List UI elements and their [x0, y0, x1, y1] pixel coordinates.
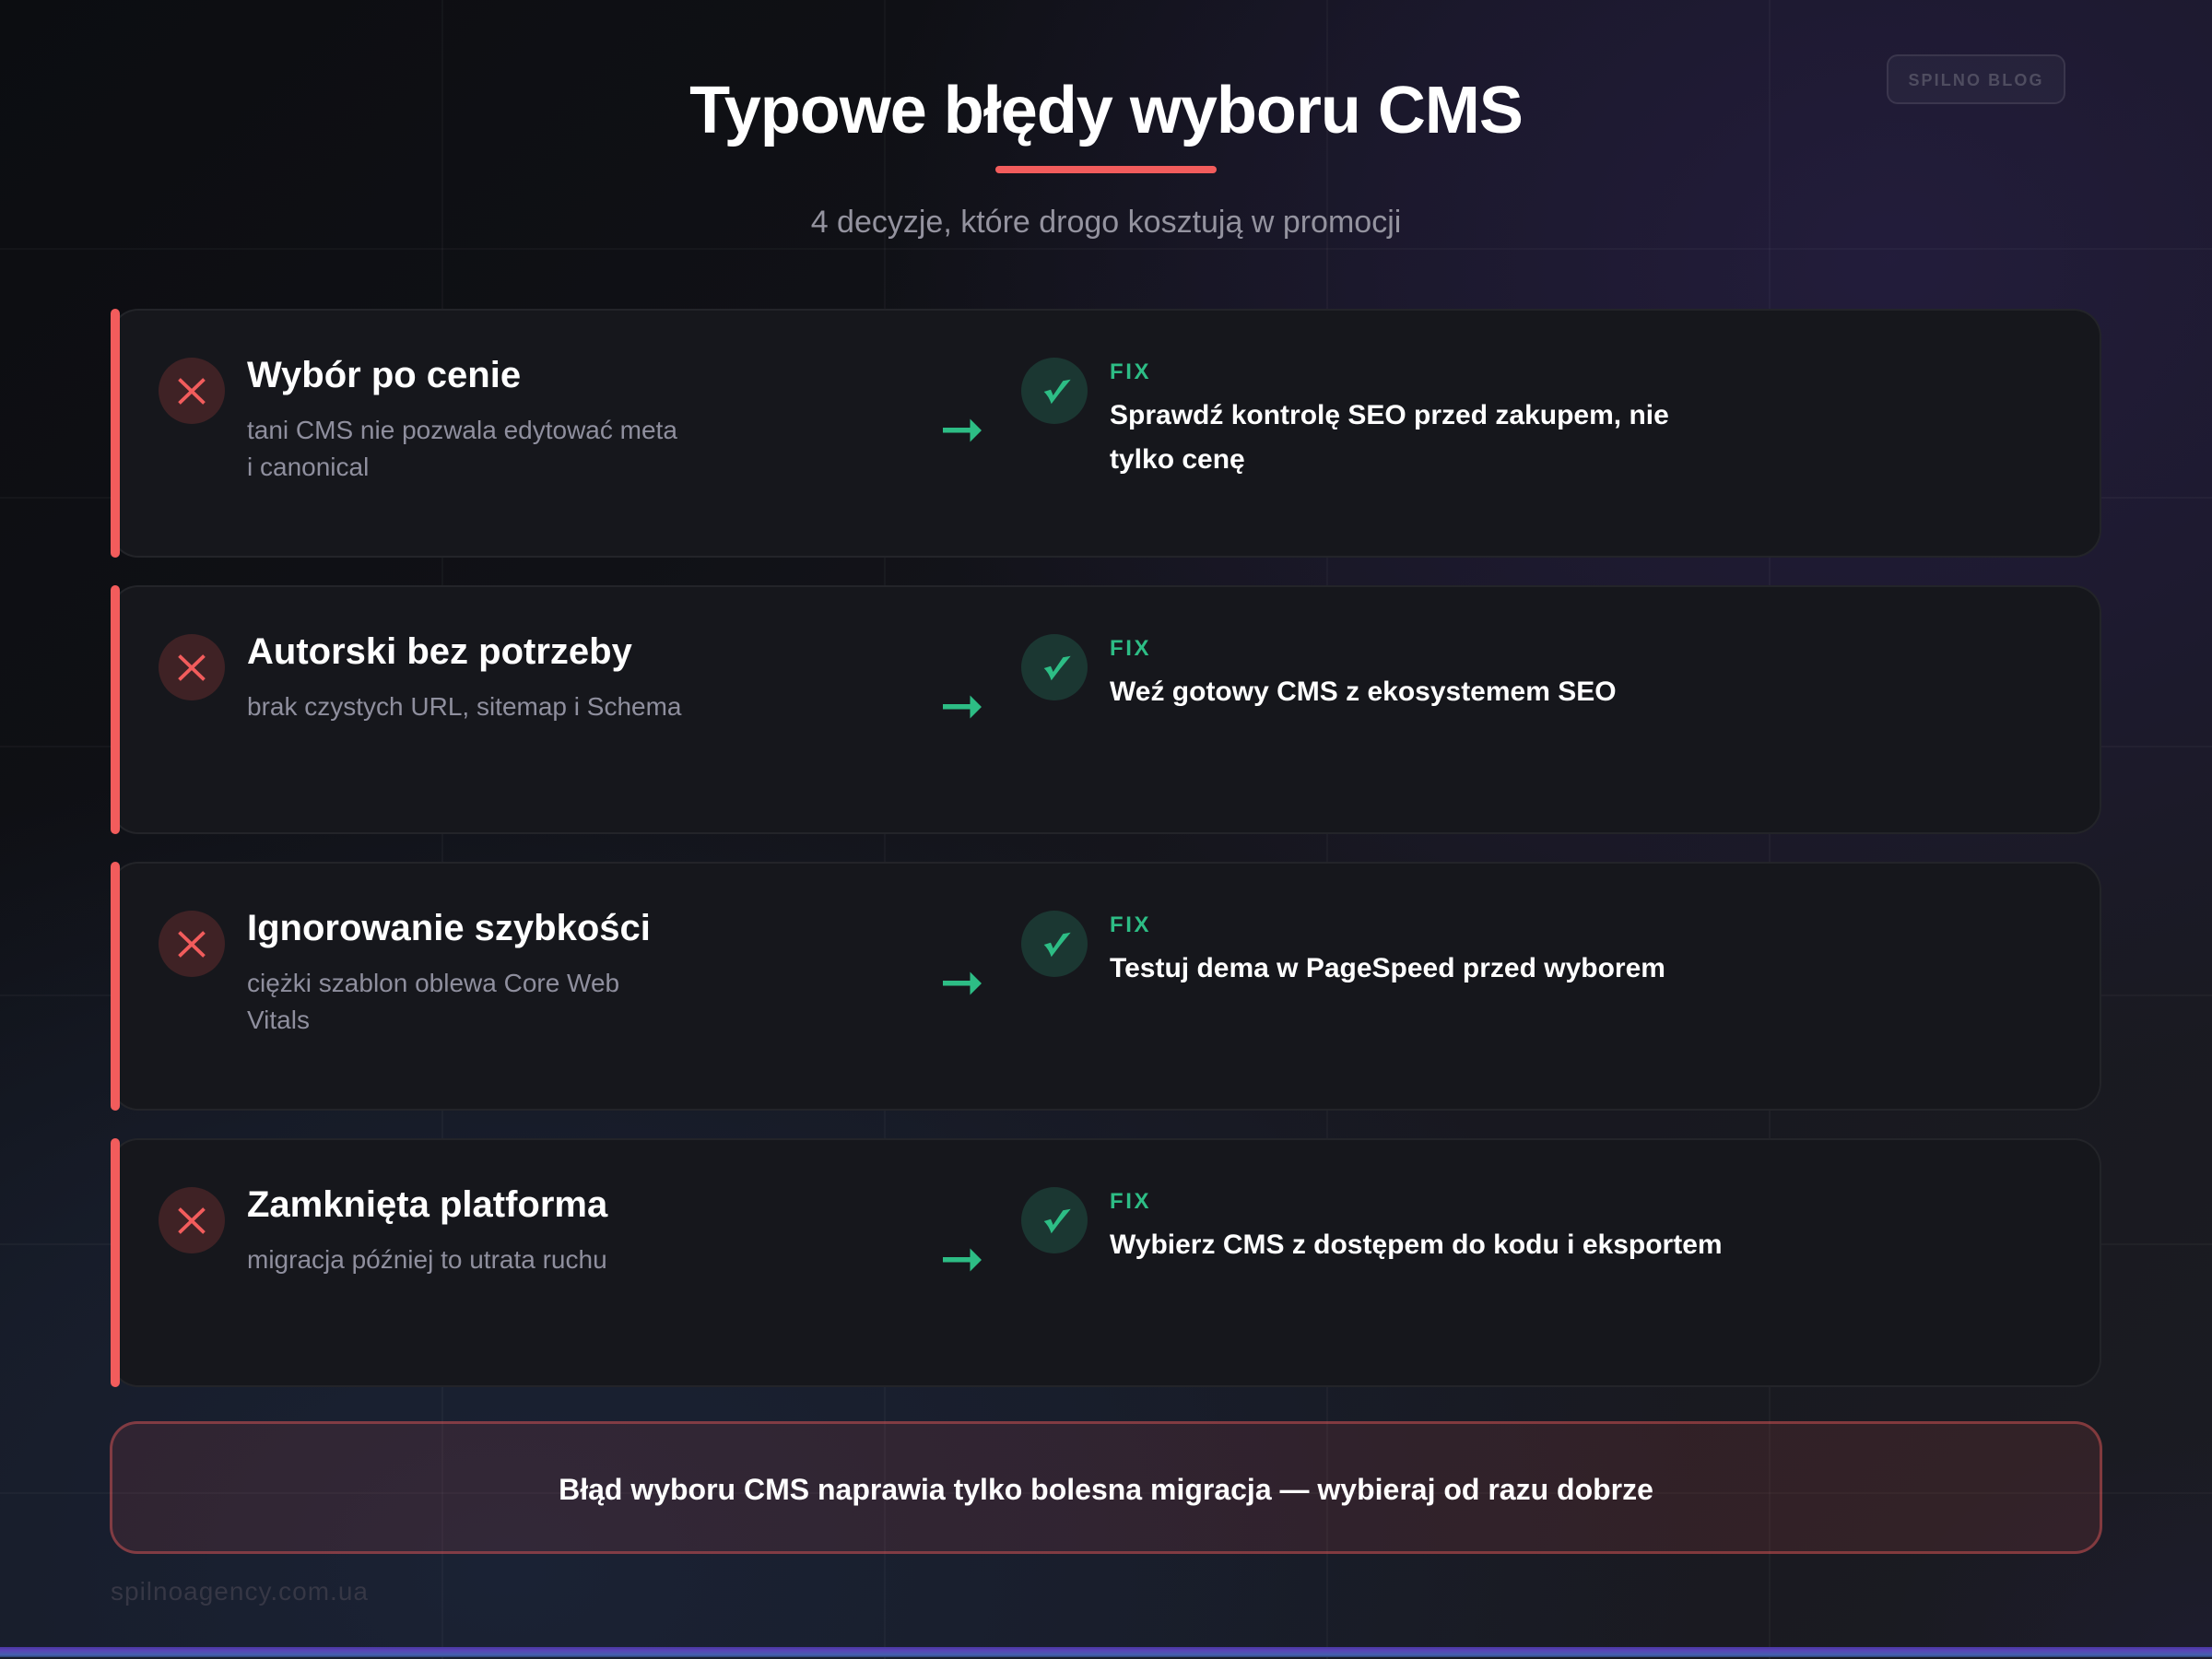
footer url: spilnoagency.com.ua — [111, 1577, 369, 1606]
fix text: Weź gotowy CMS z ekosystemem SEO — [1110, 677, 1617, 707]
accent bar — [111, 585, 120, 834]
fix label: FIX — [1110, 636, 1151, 661]
accent bar — [111, 309, 120, 558]
title underline — [995, 166, 1217, 173]
mistake description: tani CMS nie pozwala edytować meta — [247, 416, 677, 444]
accent bar — [111, 1138, 120, 1387]
bottom accent bar — [0, 1647, 2212, 1657]
mistake heading: Wybór po cenie — [247, 355, 521, 395]
panel: mistake 3 — [111, 862, 2101, 1111]
mistake description — [247, 969, 619, 1034]
mistake description: Vitals — [247, 1006, 310, 1034]
mistake description: i canonical — [247, 453, 369, 481]
mistake heading: Ignorowanie szybkości — [247, 908, 651, 948]
fix label: FIX — [1110, 1189, 1151, 1214]
panel: mistake 1 — [111, 309, 2101, 558]
icon: green check — [1021, 358, 1088, 424]
icon: green check — [1021, 1187, 1088, 1253]
callout — [110, 1421, 2102, 1554]
fix text: tylko cenę — [1110, 444, 1245, 475]
mistake heading: Zamknięta platforma — [247, 1184, 607, 1225]
icon: red cross — [159, 911, 225, 977]
arrow — [943, 695, 982, 719]
fix text: Testuj dema w PageSpeed przed wyborem — [1110, 953, 1665, 983]
fix label: FIX — [1110, 359, 1151, 384]
fix label: FIX — [1110, 912, 1151, 937]
mistake description — [247, 416, 677, 481]
callout: Błąd wyboru CMS naprawia tylko bolesna migracja — wybieraj od razu dobrze — [559, 1473, 1653, 1506]
badge: SPILNO BLOG — [1887, 54, 2065, 104]
accent bar — [111, 862, 120, 1111]
fix text: Sprawdź kontrolę SEO przed zakupem, nie — [1110, 400, 1669, 430]
arrow — [943, 418, 982, 442]
fix text — [1110, 400, 1669, 475]
panel: mistake 4 — [111, 1138, 2101, 1387]
icon: green check — [1021, 911, 1088, 977]
panel: mistake 2 — [111, 585, 2101, 834]
badge: SPILNO BLOG: SPILNO BLOG — [1908, 71, 2044, 89]
subtitle: 4 decyzje, które drogo kosztują w promocji — [811, 205, 1401, 240]
mistake heading: Autorski bez potrzeby — [247, 631, 632, 672]
mistake description: ciężki szablon oblewa Core Web — [247, 969, 619, 997]
fix text: Wybierz CMS z dostępem do kodu i eksportem — [1110, 1230, 1723, 1260]
icon: red cross — [159, 1187, 225, 1253]
arrow — [943, 1248, 982, 1272]
icon: red cross — [159, 634, 225, 700]
arrow — [943, 971, 982, 995]
mistake description: brak czystych URL, sitemap i Schema — [247, 692, 682, 721]
title: Typowe błędy wyboru CMS — [689, 74, 1523, 147]
icon: green check — [1021, 634, 1088, 700]
icon: red cross — [159, 358, 225, 424]
mistake description: migracja później to utrata ruchu — [247, 1245, 607, 1274]
